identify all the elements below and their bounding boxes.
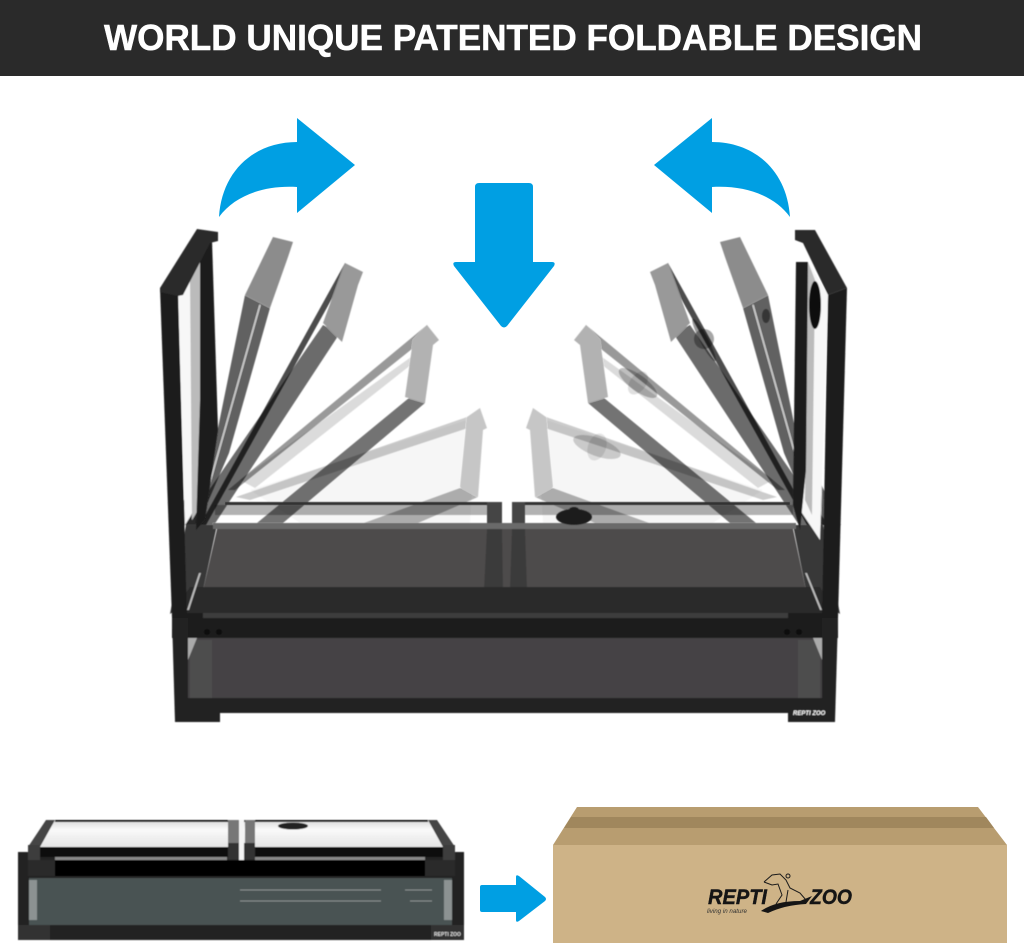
- panel 4: [228, 325, 439, 523]
- black rail: [55, 860, 425, 876]
- right leg: [788, 618, 838, 722]
- panel 5: [236, 408, 487, 523]
- lower glass band: [172, 587, 836, 614]
- box top: [553, 807, 1007, 845]
- glass lid: [40, 820, 443, 847]
- lid frame: [28, 820, 455, 847]
- base lower glass left tint: [190, 640, 212, 698]
- glass side slivers: [187, 573, 822, 610]
- lizard: [764, 874, 806, 904]
- front glass upper: [203, 529, 806, 590]
- small logo: REPTI ZOO: [434, 932, 461, 938]
- bottom left corner: [18, 925, 50, 940]
- rail rivets: [204, 629, 802, 635]
- rail end right: [425, 860, 455, 876]
- brand REPTI: REPTI: [708, 886, 768, 909]
- box front: [553, 845, 1007, 943]
- left leg: [172, 618, 220, 722]
- panel 2: [172, 237, 293, 525]
- middle rail light strip: [203, 613, 788, 618]
- base right glass light: [813, 638, 822, 660]
- folded terrarium photo: [18, 820, 464, 940]
- lid corner clamps: [28, 845, 455, 860]
- lid gap right: [255, 857, 425, 860]
- right folding panels: [526, 237, 841, 525]
- bottom right corner: [431, 925, 464, 940]
- centre clip: [228, 820, 255, 860]
- small logo on frame: REPTI ZOO: [793, 711, 826, 717]
- tagline: living in nature: [707, 909, 748, 915]
- panel 3: [185, 263, 363, 525]
- lid gap left: [55, 857, 227, 860]
- side glass right: [793, 525, 840, 614]
- right post: [793, 230, 847, 618]
- base lower glass right tint: [798, 640, 820, 698]
- arrow: right: [480, 875, 546, 922]
- brand ZOO: ZOO: [809, 886, 852, 909]
- arrow: down: [453, 183, 555, 328]
- arrow: curved right: [654, 118, 790, 217]
- top back rails: [215, 502, 793, 524]
- front glass top edge: [213, 523, 796, 529]
- terrarium illustration with folding panels: [160, 229, 847, 722]
- left folding panels: [172, 237, 487, 525]
- title banner: [0, 0, 1024, 76]
- glass side highlights: [29, 880, 452, 920]
- right panel vent knobs: [570, 309, 770, 464]
- base top vent knob: [556, 507, 592, 525]
- reflection lines: [240, 890, 432, 901]
- black lid edge: [28, 847, 455, 857]
- glass front: [29, 878, 452, 925]
- base lower glass: [188, 638, 822, 698]
- rail end left: [28, 860, 55, 876]
- bottom rail: [175, 698, 835, 713]
- middle rail: [172, 613, 838, 638]
- base left glass light: [188, 638, 197, 660]
- title: WORLD UNIQUE PATENTED FOLDABLE DESIGN: [104, 17, 922, 58]
- centre divider: [484, 529, 527, 590]
- tape: [564, 817, 994, 828]
- branch: [761, 896, 812, 913]
- side glass left: [170, 525, 217, 614]
- left post: [160, 229, 218, 618]
- arrow: curved left: [219, 118, 355, 217]
- cardboard box: [553, 807, 1007, 943]
- tank front body: [18, 852, 464, 940]
- logo: [707, 874, 852, 915]
